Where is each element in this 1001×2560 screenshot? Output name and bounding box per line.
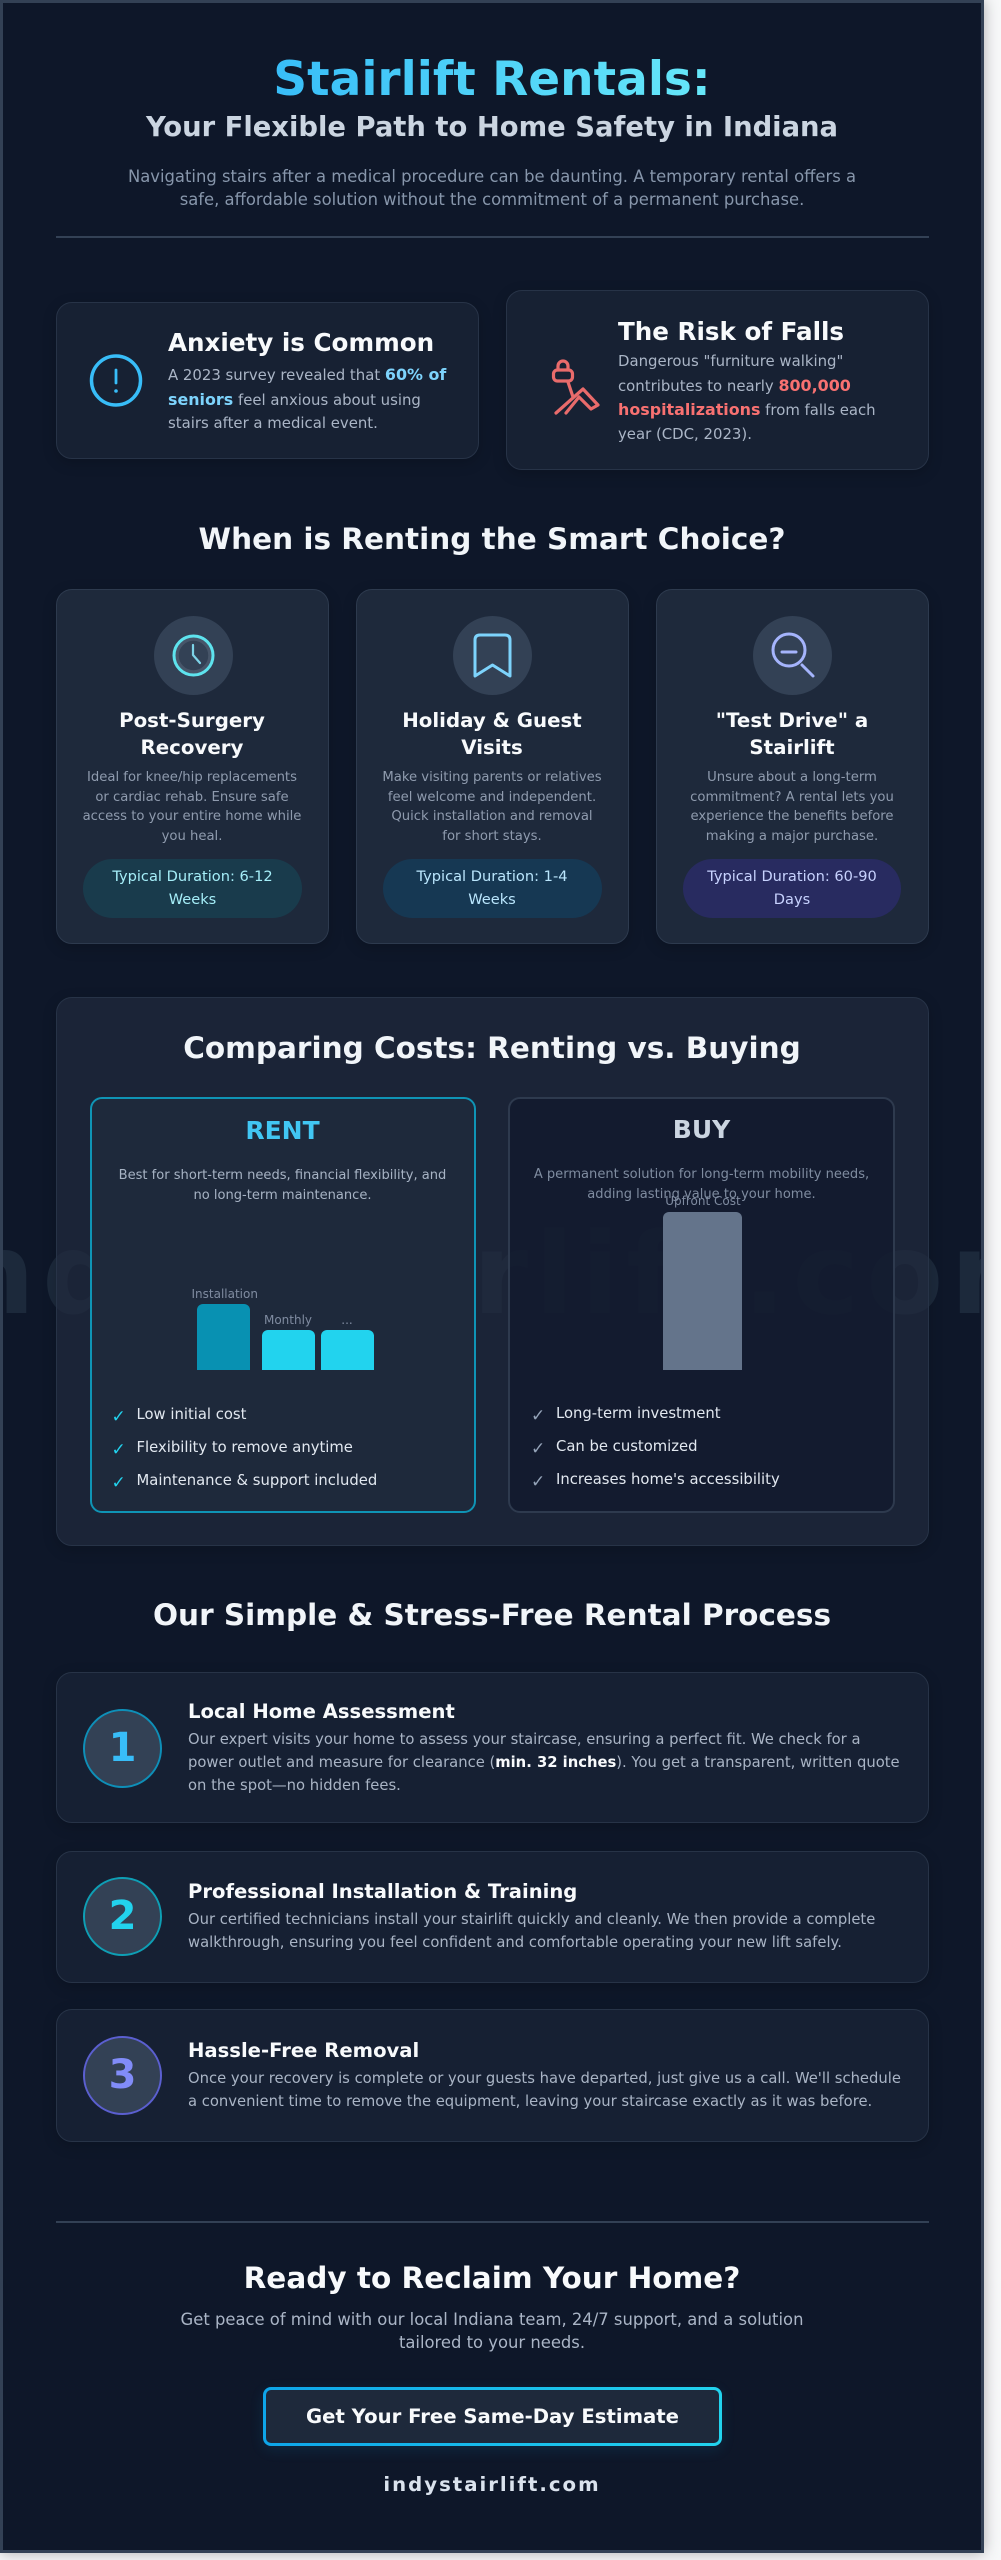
buy description: adding lasting value to your home. xyxy=(587,1186,816,1202)
step title: Local Home Assessment xyxy=(188,1700,455,1723)
card text: Make visiting parents or relatives xyxy=(382,770,602,785)
rent description xyxy=(119,1168,446,1202)
stat heading: Anxiety is Common xyxy=(168,328,434,357)
website: indystairlift.com xyxy=(383,2473,601,2496)
step title: Professional Installation & Training xyxy=(188,1880,577,1903)
card text: commitment? A rental lets you xyxy=(690,790,894,805)
panel: step 2 xyxy=(56,1851,929,1983)
header xyxy=(128,52,856,209)
step text: on the spot—no hidden fees. xyxy=(188,1777,401,1794)
cta button xyxy=(263,2387,722,2446)
benefit: ✓ xyxy=(112,1472,126,1492)
step title: Hassle-Free Removal xyxy=(188,2039,419,2062)
icon: falling person xyxy=(552,359,600,415)
duration pill xyxy=(83,858,302,918)
panel: buy xyxy=(508,1096,895,1512)
benefit: ✓ xyxy=(112,1406,126,1426)
card title: "Test Drive" a xyxy=(716,709,868,732)
benefit: Maintenance & support included xyxy=(136,1472,377,1488)
benefit: ✓ xyxy=(531,1439,545,1459)
heading: comparing costs: Comparing Costs: Renting vs. Buying xyxy=(183,1031,801,1065)
step text xyxy=(188,1911,875,1951)
benefit: Low initial cost xyxy=(136,1406,246,1422)
benefit: ✓ xyxy=(531,1472,545,1492)
benefit xyxy=(531,1438,698,1459)
rent bar chart xyxy=(192,1286,374,1370)
benefit xyxy=(112,1406,246,1426)
buy bar chart xyxy=(663,1194,742,1370)
cta text: Get peace of mind with our local Indiana team, 24/7 support, and a solution xyxy=(181,2310,803,2329)
panel: holiday visits xyxy=(356,589,629,944)
label: upfront cost: Upfront Cost xyxy=(665,1194,741,1208)
cta heading: Ready to Reclaim Your Home? xyxy=(244,2261,740,2295)
step text: Once your recovery is complete or your guests have departed, just give us a call. We'll schedule xyxy=(188,2070,901,2087)
card text: for short stays. xyxy=(442,829,542,844)
bar: ongoing xyxy=(320,1330,374,1370)
card title: Visits xyxy=(461,736,523,758)
icon: magnifier xyxy=(753,616,832,695)
cta text xyxy=(181,2310,803,2352)
label: monthly: Monthly xyxy=(264,1312,312,1326)
cta text: tailored to your needs. xyxy=(399,2333,585,2352)
label: installation: Installation xyxy=(192,1286,258,1300)
stat text: stairs after a medical event. xyxy=(168,414,378,432)
benefit: ✓ xyxy=(531,1406,545,1426)
card text: Ideal for knee/hip replacements xyxy=(87,770,297,785)
buy description xyxy=(534,1166,869,1202)
card text: Unsure about a long-term xyxy=(707,770,877,785)
footer call to action xyxy=(181,2261,803,2496)
step text xyxy=(188,2070,901,2110)
duration pill: Typical Duration: 60-90 xyxy=(707,868,877,884)
title: Stairlift Rentals: xyxy=(273,52,711,107)
stat text: Dangerous "furniture walking" xyxy=(618,352,843,370)
intro text: safe, affordable solution without the commitment of a permanent purchase. xyxy=(180,190,804,209)
panel: falls stat xyxy=(506,290,929,470)
rent description: no long-term maintenance. xyxy=(193,1188,372,1202)
step text: a convenient time to remove the equipment, leaving your staircase exactly as it was before. xyxy=(188,2093,872,2110)
intro text: Navigating stairs after a medical procedure can be daunting. A temporary rental offers a xyxy=(128,167,856,186)
card text xyxy=(83,770,301,844)
stat text xyxy=(168,365,446,432)
card text xyxy=(382,770,602,844)
panel: cost comparison xyxy=(56,997,929,1546)
step text: power outlet and measure for clearance (min. 32 inches). You get a transparent, written quote xyxy=(188,1754,900,1771)
subtitle: Your Flexible Path to Home Safety in Indiana xyxy=(146,112,838,143)
stat text xyxy=(618,352,876,443)
benefit: Long-term investment xyxy=(556,1405,721,1422)
rent benefits xyxy=(112,1406,377,1492)
duration pill: Days xyxy=(774,890,810,908)
card text: you heal. xyxy=(162,829,222,844)
icon: alert circle xyxy=(90,354,142,407)
card text: or cardiac rehab. Ensure safe xyxy=(95,790,289,805)
stat text: A 2023 survey revealed that 60% of xyxy=(168,365,446,384)
step number xyxy=(83,1877,162,1956)
duration pill xyxy=(382,858,602,918)
panel: rent xyxy=(90,1096,476,1512)
card text: making a major purchase. xyxy=(706,829,878,844)
step text: Our certified technicians install your stairlift quickly and cleanly. We then provide a complete xyxy=(188,1911,875,1928)
rent heading: RENT xyxy=(245,1116,320,1144)
duration pill: Typical Duration: 1-4 xyxy=(416,868,568,884)
card title xyxy=(119,709,265,758)
step number: 2 xyxy=(109,1893,136,1939)
card text: experience the benefits before xyxy=(690,809,894,824)
bar: upfront cost xyxy=(663,1212,742,1370)
stat heading: The Risk of Falls xyxy=(618,317,844,346)
benefit: ✓ xyxy=(112,1440,126,1460)
bar: installation xyxy=(196,1304,250,1370)
stat text: contributes to nearly 800,000 xyxy=(618,376,851,395)
buy benefits xyxy=(531,1405,780,1492)
intro text xyxy=(128,167,856,209)
step number xyxy=(83,2036,162,2115)
label: ellipsis: ... xyxy=(341,1312,353,1326)
step text xyxy=(188,1731,900,1794)
duration pill xyxy=(683,858,901,918)
step number: 1 xyxy=(109,1725,136,1771)
rent description: Best for short-term needs, financial flexibility, and xyxy=(119,1168,446,1182)
title xyxy=(56,50,928,110)
panel: test drive xyxy=(656,589,929,944)
heading: rental process: Our Simple & Stress-Free Rental Process xyxy=(153,1598,831,1632)
card title: Post-Surgery xyxy=(119,709,265,732)
step text: Our expert visits your home to assess your staircase, ensuring a perfect fit. We check for a xyxy=(188,1731,860,1748)
card text: Quick installation and removal xyxy=(391,809,593,824)
duration pill: Typical Duration: 6-12 xyxy=(112,868,273,884)
stat text: seniors feel anxious about using xyxy=(168,390,421,408)
stat text: hospitalizations from falls each xyxy=(618,400,876,419)
icon: bookmark xyxy=(453,616,532,695)
panel: step 1 xyxy=(56,1672,929,1823)
card title xyxy=(402,709,582,758)
duration pill: Weeks xyxy=(169,890,216,908)
card text: access to your entire home while xyxy=(83,809,301,824)
step number xyxy=(83,1709,162,1788)
step number: 3 xyxy=(109,2052,136,2098)
panel: step 3 xyxy=(56,2009,929,2142)
card title xyxy=(716,709,868,758)
card text xyxy=(690,770,894,844)
icon: clock xyxy=(154,616,233,695)
card title: Holiday & Guest xyxy=(402,709,582,732)
benefit: Can be customized xyxy=(556,1438,698,1455)
benefit: Flexibility to remove anytime xyxy=(136,1438,353,1456)
duration pill: Weeks xyxy=(468,890,516,908)
benefit: Increases home's accessibility xyxy=(556,1471,780,1488)
buy description: A permanent solution for long-term mobility needs, xyxy=(534,1166,869,1182)
panel: anxiety stat xyxy=(56,302,479,459)
buy heading: BUY xyxy=(673,1114,730,1144)
bar: monthly xyxy=(262,1330,314,1370)
card title: Recovery xyxy=(141,736,243,758)
heading: when is renting: When is Renting the Smart Choice? xyxy=(199,522,785,556)
panel: post-surgery xyxy=(56,589,329,944)
cta button: Get Your Free Same-Day Estimate xyxy=(306,2405,679,2428)
stat text: year (CDC, 2023). xyxy=(618,425,752,443)
step text: walkthrough, ensuring you feel confident and comfortable operating your new lift safely. xyxy=(188,1934,842,1951)
card title: Stairlift xyxy=(749,736,835,758)
card text: feel welcome and independent. xyxy=(388,790,596,805)
